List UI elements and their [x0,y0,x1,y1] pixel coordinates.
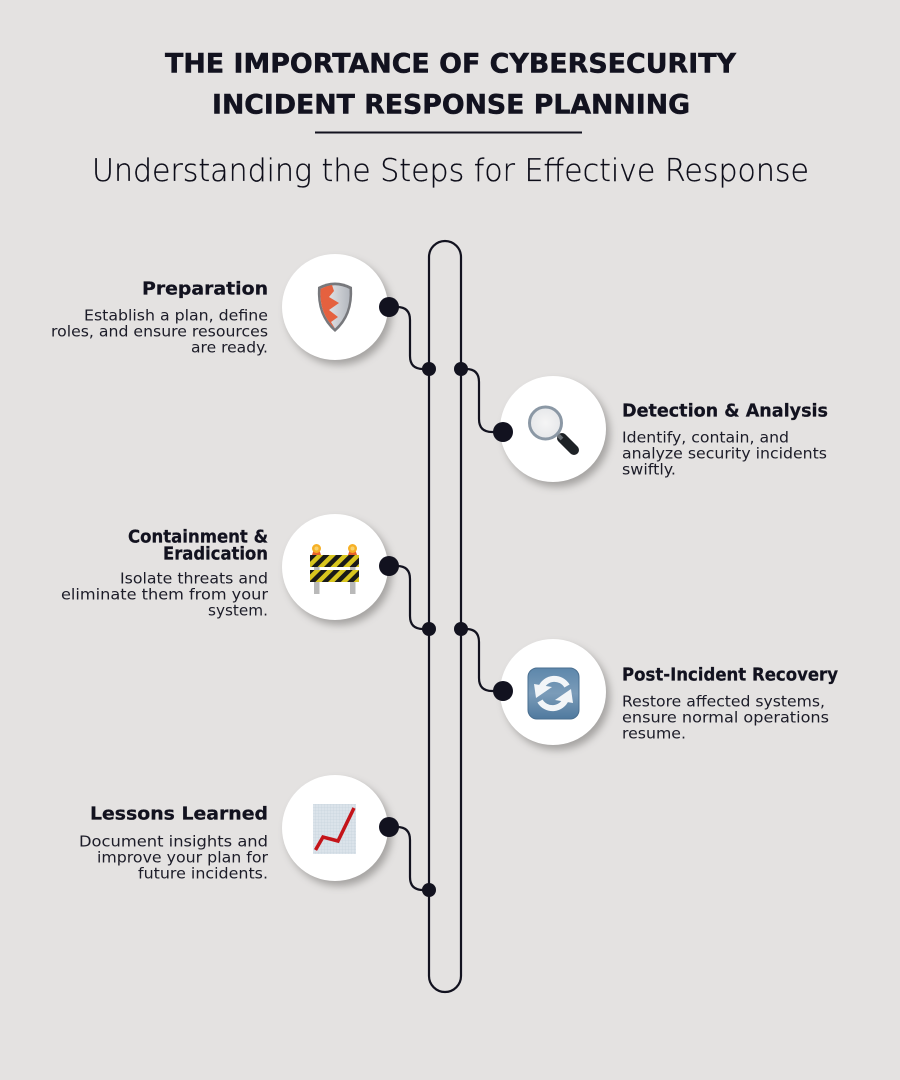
icon: shield [318,282,352,332]
Detection circle [500,376,610,487]
title divider [315,132,582,134]
icon: road barrier [310,544,359,594]
Detection connector [454,362,513,442]
step: Containment & Eradication [61,514,436,636]
Containment text: Isolate threats and [120,570,268,588]
Preparation connector [379,297,436,376]
Recovery text: ensure normal operations [622,708,829,726]
Lessons circle [282,775,392,886]
Preparation text: are ready. [191,338,268,356]
Preparation text: Preparation [142,280,268,300]
icon: rising chart [313,804,356,854]
Preparation text: roles, and ensure resources [51,322,268,340]
title: INCIDENT RESPONSE PLANNING [212,90,690,120]
Containment text [61,528,269,620]
Containment text: eliminate them from your [61,586,269,604]
Recovery text: Post-Incident Recovery [622,666,839,686]
Detection text: Detection & Analysis [622,402,828,422]
Recovery text: resume. [622,724,686,742]
Lessons text: Lessons Learned [90,804,268,824]
Containment connector [379,556,436,636]
Lessons text [79,804,269,882]
Preparation circle [282,254,392,365]
Lessons text: future incidents. [138,864,268,882]
step: Preparation [51,254,436,376]
subtitle: Understanding the Steps for Effective Response [92,153,809,189]
Lessons text: Document insights and [79,832,268,850]
title: THE IMPORTANCE OF CYBERSECURITY [165,48,736,80]
step: Lessons Learned [79,775,436,897]
Containment text: Eradication [163,544,268,564]
icon: magnifying glass [530,407,574,450]
Recovery text: Restore affected systems, [622,692,825,710]
Detection text: Identify, contain, and [622,428,789,446]
Lessons text: improve your plan for [97,848,269,866]
Containment circle [282,514,392,625]
Preparation text: Establish a plan, define [84,306,268,324]
Detection text: analyze security incidents [622,444,827,462]
step: Post-Incident Recovery [454,622,839,750]
step: Detection & Analysis [454,362,828,487]
title [165,48,736,120]
Preparation text [51,280,268,356]
Recovery circle [500,639,610,750]
icon: refresh arrows [528,668,579,719]
Containment text: system. [208,602,268,620]
timeline pill [429,241,461,992]
Recovery connector [454,622,513,701]
Lessons connector [379,817,436,897]
Detection text: swiftly. [622,460,676,478]
Recovery text [622,666,839,742]
Detection text [622,402,828,478]
Containment text: Containment & [128,528,268,548]
